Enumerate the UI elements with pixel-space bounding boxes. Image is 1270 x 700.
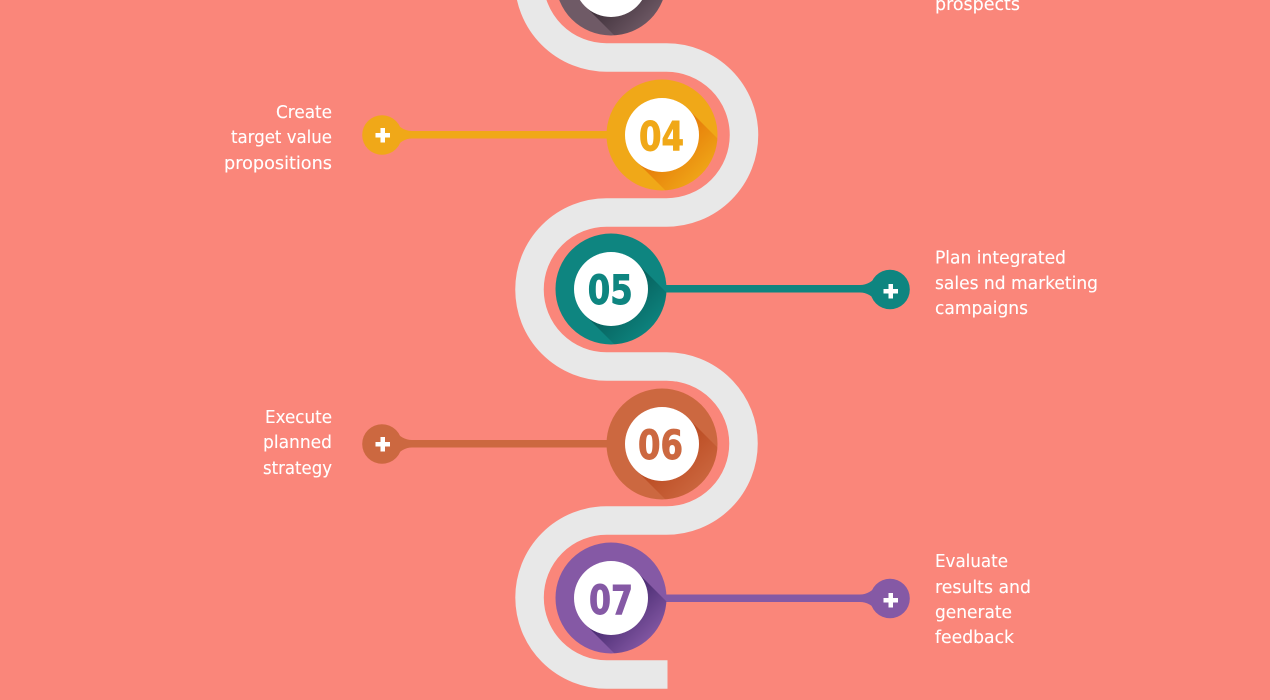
step 07 badge: 07 (589, 578, 633, 624)
step 05 badge (556, 234, 666, 344)
step 04 badge: 04 (639, 114, 684, 160)
step 07 (556, 542, 1030, 654)
step 04 label: propositions (224, 153, 332, 174)
step 06 label (263, 407, 332, 479)
step 06 label: strategy (263, 458, 332, 479)
step 05 plus icon (884, 284, 898, 298)
step 04 label: Create (276, 102, 332, 123)
step 06 badge (606, 388, 718, 500)
step 07 label: Evaluate (935, 551, 1008, 572)
step 06 connector (362, 424, 612, 464)
step 05 label: campaigns (935, 298, 1028, 319)
step 04 plus icon (376, 128, 390, 142)
step 05 label: sales nd marketing (935, 273, 1098, 294)
step 06 badge: 06 (638, 423, 683, 469)
step 05 label: Plan integrated (935, 247, 1066, 268)
step 04 connector (362, 115, 612, 155)
step 04 label: target value (231, 127, 332, 148)
step 05 connector (660, 270, 910, 309)
step 05 (556, 234, 1096, 344)
step 06 label: Execute (265, 407, 332, 428)
step 07 label (935, 551, 1031, 648)
step 07 plus icon (884, 593, 898, 608)
step 07 connector (660, 579, 910, 618)
step 06 plus icon (376, 437, 390, 452)
step 06 (264, 388, 718, 500)
step 06 label: planned (263, 432, 332, 453)
winding road path (529, 0, 744, 674)
step 04 label (224, 102, 332, 174)
step 07 label: generate (935, 602, 1012, 623)
step 07 badge (556, 542, 666, 654)
step 03 badge (559, 0, 663, 36)
step 04 badge (606, 80, 718, 190)
step 05 badge: 05 (588, 268, 633, 314)
step 07 label: results and (935, 577, 1031, 598)
step 05 label (935, 247, 1098, 319)
step 03 (559, 0, 1020, 36)
step 04 (226, 80, 718, 190)
step 07 label: feedback (935, 627, 1015, 648)
